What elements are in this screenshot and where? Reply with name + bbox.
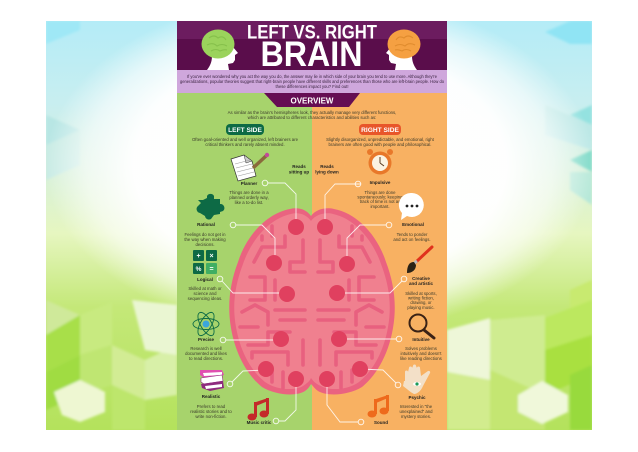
overview text: which are attributed to different characteristics and abilities such as: bbox=[248, 115, 376, 120]
item: creative and artistic bbox=[405, 247, 437, 310]
reads lying down label: Reads bbox=[320, 164, 334, 169]
item: logical: science and bbox=[194, 291, 217, 296]
icon: palm with eye bbox=[403, 364, 430, 394]
item: planner: like a to-do list. bbox=[235, 200, 263, 205]
item: impulsive: Things are done bbox=[364, 190, 396, 195]
left side description bbox=[192, 137, 299, 147]
item: impulsive bbox=[357, 149, 403, 209]
item: emotional bbox=[393, 193, 431, 242]
item: music critic: Music critic bbox=[247, 420, 272, 425]
overview tab bbox=[264, 93, 360, 107]
icon: puzzle piece bbox=[197, 194, 224, 220]
left side heading: LEFT SIDE bbox=[228, 127, 262, 134]
reads lying down label: lying down bbox=[315, 170, 339, 174]
reads sitting up label: sitting up bbox=[289, 170, 309, 174]
connector lines bbox=[217, 180, 407, 425]
icon: calculator tiles: × bbox=[209, 253, 214, 260]
item: rational bbox=[184, 194, 226, 247]
item: planner bbox=[229, 153, 269, 205]
item: precise: documented and likes bbox=[185, 351, 227, 356]
item: psychic: Interested in "the bbox=[400, 404, 433, 409]
brain diagram bbox=[217, 180, 407, 425]
icon: calculator tiles bbox=[193, 250, 217, 274]
item: logical: Logical bbox=[197, 277, 213, 282]
item: rational: Rational bbox=[197, 222, 215, 227]
reads lying down label bbox=[315, 164, 339, 174]
item: rational: the way when making bbox=[184, 237, 226, 242]
item: impulsive: spontaneously; keeping bbox=[357, 194, 403, 200]
item: realistic: Realistic bbox=[202, 394, 221, 399]
item: logical: sequencing ideas. bbox=[188, 296, 222, 301]
item: creative and artistic: drawing, or bbox=[410, 300, 432, 305]
item: intuitive: Intuitive bbox=[412, 337, 430, 342]
item: impulsive: Impulsive bbox=[370, 180, 391, 185]
icon: atom bbox=[193, 310, 219, 338]
item: realistic: write non-fiction. bbox=[195, 414, 227, 419]
icon: calculator tiles: = bbox=[209, 266, 214, 273]
item: planner: Planner bbox=[241, 181, 257, 186]
right side description: brainers are often good with people and philosophical. bbox=[329, 142, 431, 147]
icon: magnifying glass bbox=[410, 314, 434, 338]
item: creative and artistic: and artistic bbox=[409, 281, 433, 286]
title: BRAIN bbox=[260, 35, 362, 74]
icon: paint brush bbox=[407, 247, 432, 273]
item: emotional: Emotional bbox=[402, 222, 424, 227]
item: realistic: realistic stories and to bbox=[190, 409, 232, 414]
icon: red music note bbox=[248, 398, 269, 420]
icon: calculator tiles: + bbox=[196, 253, 201, 260]
left side description: Often goal-oriented and well organized, left brainers are bbox=[192, 137, 299, 142]
brain folds bbox=[240, 226, 384, 388]
item: emotional: and act on feelings. bbox=[393, 237, 431, 242]
header banner bbox=[177, 21, 447, 74]
item: psychic bbox=[399, 364, 433, 419]
item: psychic: unexplained" and bbox=[399, 409, 433, 414]
title: LEFT VS. RIGHT bbox=[247, 22, 377, 44]
right side heading: RIGHT SIDE bbox=[361, 127, 399, 134]
item: precise: to read directions. bbox=[189, 356, 223, 361]
left side description: critical thinkers and rarely absent minded. bbox=[205, 142, 285, 147]
item: psychic: Psychic bbox=[408, 395, 426, 400]
item: creative and artistic: playing music. bbox=[407, 305, 435, 310]
icon: left head with green brain bbox=[202, 30, 238, 70]
intro text band: generalizations, popular theories suggest that right-brain people have different skills and preferences than those who are left-brain people. How do bbox=[180, 79, 445, 84]
item: rational: decisions. bbox=[195, 242, 215, 247]
left side heading bbox=[226, 124, 264, 135]
intro text band bbox=[177, 70, 447, 93]
item: planner: Things are done in a bbox=[229, 190, 269, 195]
item: emotional: Tends to ponder bbox=[397, 232, 428, 237]
overview tab: OVERVIEW bbox=[291, 96, 334, 106]
item: precise: Research is well bbox=[190, 346, 222, 351]
item: realistic bbox=[190, 370, 232, 419]
icon: stack of books bbox=[200, 370, 224, 391]
item: logical: Skilled at math or bbox=[188, 286, 222, 291]
item: planner: planned orderly way, bbox=[229, 195, 269, 200]
background: geometric green and blue pattern bbox=[46, 21, 592, 430]
item: intuitive: Solves problems bbox=[405, 346, 437, 351]
icon: paper and pencil bbox=[231, 153, 269, 181]
overview text: As similar as the brain's hemispheres look, they actually manage very different functions, bbox=[228, 110, 396, 115]
reads sitting up label bbox=[289, 164, 309, 174]
right side heading bbox=[359, 124, 401, 135]
item: impulsive: track of time is not as bbox=[360, 199, 400, 204]
intro text band: these differences impact you? Find out! bbox=[275, 84, 349, 89]
item: creative and artistic: writing fiction, bbox=[408, 296, 434, 300]
icon: speech bubble bbox=[399, 193, 424, 220]
item: impulsive: important. bbox=[370, 204, 390, 209]
right side description bbox=[326, 137, 435, 147]
title bbox=[247, 22, 377, 74]
overview text bbox=[228, 110, 396, 120]
brain outline bbox=[229, 208, 395, 394]
item: sound bbox=[368, 395, 389, 425]
left side background bbox=[177, 93, 312, 430]
item: intuitive: like reading directions bbox=[400, 356, 442, 361]
item: logical bbox=[188, 250, 222, 301]
icon: alarm clock bbox=[367, 149, 393, 174]
infographic panel bbox=[177, 21, 447, 430]
item: realistic: Prefers to read bbox=[197, 404, 226, 409]
item: sound: Sound bbox=[374, 420, 388, 425]
item: creative and artistic: Skilled at sports, bbox=[405, 291, 437, 296]
item: music critic bbox=[247, 398, 272, 425]
icon: right head with orange brain bbox=[386, 30, 420, 70]
brain nodes bbox=[258, 219, 368, 387]
reads sitting up label: Reads bbox=[292, 164, 306, 169]
right side description: Slightly disorganized, unpredictable, and emotional, right bbox=[326, 137, 435, 142]
item: intuitive bbox=[400, 314, 442, 361]
item: precise: Precise bbox=[198, 337, 215, 342]
item: intuitive: intuitively and doesn't bbox=[401, 351, 442, 356]
icon: orange music note bbox=[368, 395, 389, 418]
right side background bbox=[312, 93, 447, 430]
icon: calculator tiles: % bbox=[196, 266, 202, 273]
item: rational: Feelings do not get in bbox=[184, 232, 226, 237]
intro text band: If you've ever wondered why you act the way you do, the answer may lie in which side of your brain you tend to use more. Although they're bbox=[187, 74, 438, 79]
item: psychic: mystery stories. bbox=[401, 414, 431, 419]
item: precise bbox=[185, 310, 227, 361]
item: creative and artistic: Creative bbox=[412, 276, 430, 281]
